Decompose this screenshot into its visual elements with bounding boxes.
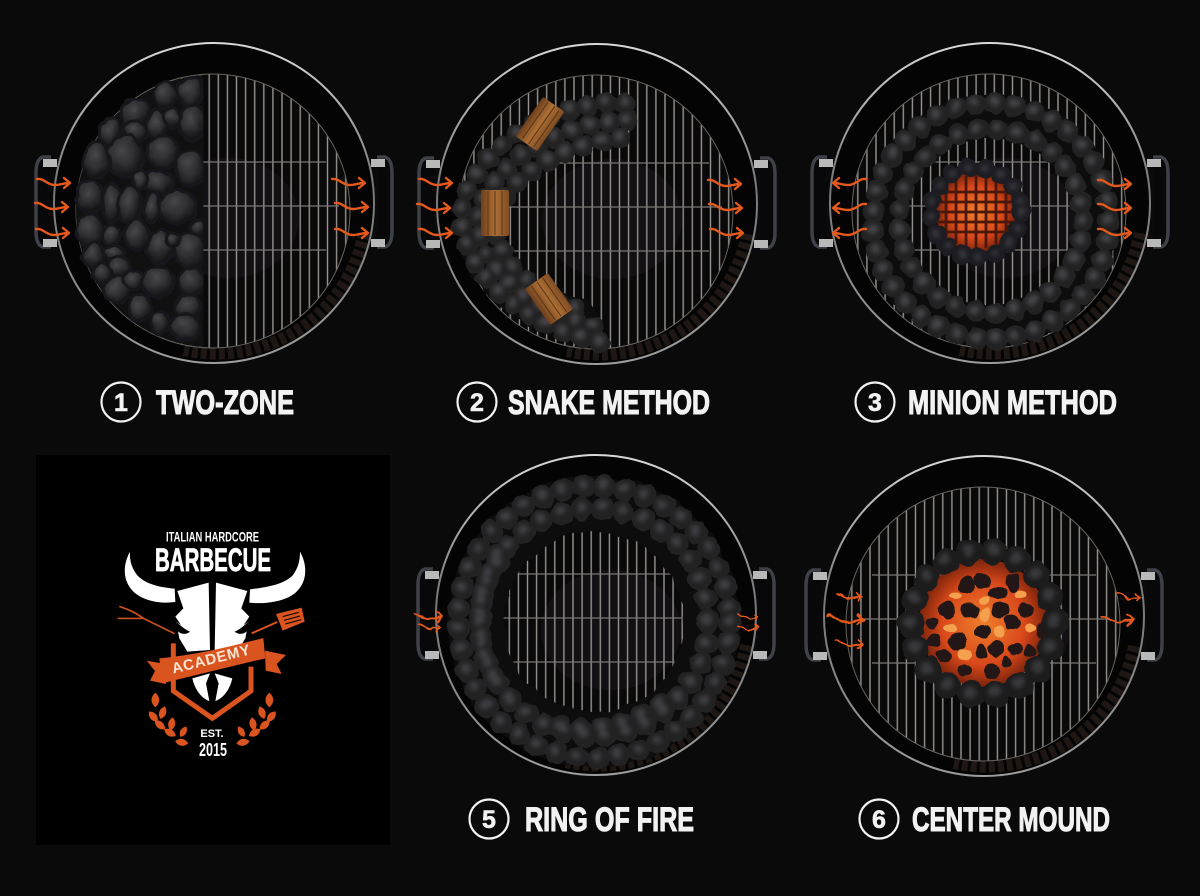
- logo heading: Barbecue: BARBECUE: [155, 542, 271, 578]
- label: ring of fire: 5: [482, 806, 496, 834]
- panel: grill 3 minion method: [812, 43, 1168, 363]
- logo heading: Italian Hardcore: ITALIAN HARDCORE: [166, 530, 259, 544]
- skull eyes: [176, 622, 249, 634]
- wood chunk top: [516, 97, 564, 151]
- label: center mound: [860, 800, 1110, 839]
- airflow arrows: [35, 178, 368, 238]
- laurels: [146, 693, 278, 747]
- logo: Italian Hardcore Barbecue Academy: [118, 530, 305, 760]
- label: center mound: 6: [872, 806, 886, 834]
- central lit coals: [931, 167, 1021, 257]
- label: center mound: CENTER MOUND: [912, 801, 1110, 839]
- label: minion method: 3: [868, 389, 882, 417]
- logo artwork: bull skull and tools: [118, 552, 305, 747]
- wood chunk middle: [481, 190, 509, 236]
- airflow arrows: [417, 178, 743, 238]
- charcoal double ring: [872, 101, 1109, 339]
- ribbon text: Academy: ACADEMY: [170, 642, 252, 678]
- label: ring of fire: [470, 800, 694, 839]
- ribbon band: [159, 638, 265, 683]
- panel: logo background: [36, 455, 390, 845]
- spatula: [252, 608, 305, 633]
- label: two-zone: TWO-ZONE: [156, 384, 294, 422]
- logo text: est.: EST.: [200, 728, 224, 740]
- charcoal pile on left half: [74, 75, 204, 347]
- label: minion method: MINION METHOD: [908, 384, 1117, 422]
- airflow arrows: [833, 178, 1131, 238]
- panel: grill 2 snake method: [417, 44, 775, 364]
- label: two-zone: 1: [114, 389, 128, 417]
- label: two-zone: [102, 382, 294, 422]
- label: minion method: [856, 382, 1117, 422]
- label: snake method: SNAKE METHOD: [508, 384, 710, 422]
- ribbon tails: [147, 651, 286, 684]
- label: snake method: [458, 382, 710, 422]
- airflow arrows: [828, 593, 1140, 648]
- panel: grill 6 center mound: [806, 456, 1162, 776]
- ember centre: [919, 559, 1050, 687]
- panel: grill 1 two-zone: [35, 43, 392, 363]
- shield outline: [173, 643, 251, 718]
- label: ring of fire: RING OF FIRE: [525, 801, 694, 839]
- charcoal ring: [457, 484, 730, 758]
- charcoal snake: [461, 101, 628, 344]
- label: snake method: 2: [470, 389, 484, 417]
- wood chunk bottom: [525, 273, 573, 325]
- panel: grill 5 ring of fire: [415, 455, 774, 775]
- fork: [118, 607, 174, 633]
- logo text: 2015: 2015: [199, 740, 227, 760]
- coal ring around embers: [910, 549, 1055, 695]
- airflow arrows: [415, 613, 759, 632]
